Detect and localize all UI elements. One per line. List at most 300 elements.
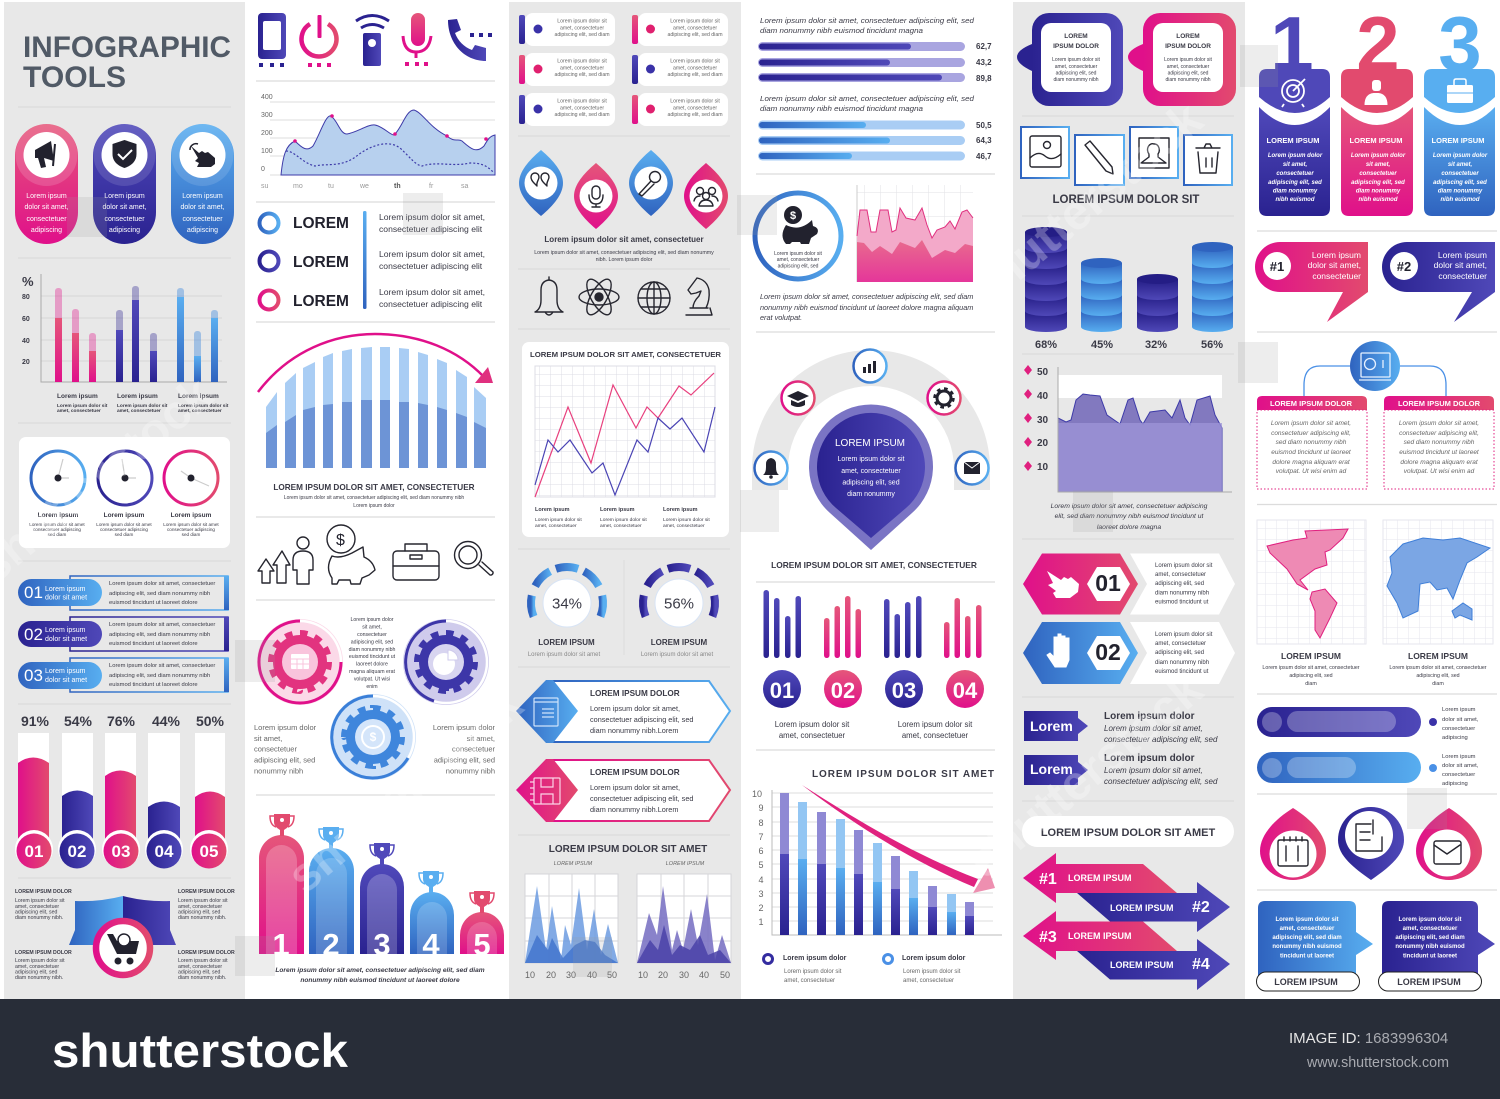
panel: four bar groups: 01 — [770, 678, 794, 703]
hex row 02: amet, consectetuer — [1155, 641, 1206, 647]
capsule: shield: dolor sit amet, — [103, 204, 147, 211]
area chart: weekly: su — [261, 183, 268, 190]
badge: microphone — [574, 163, 618, 229]
card 3: sit amet, — [1448, 162, 1473, 168]
card: blue arrow — [516, 680, 730, 743]
list: three lorem items: Lorem ipsum dolor sit amet, — [379, 287, 485, 297]
list: lorem tags: Lorem ipsum dolor — [1104, 711, 1195, 722]
bar chart: percent groups — [22, 274, 229, 414]
capsule: megaphone: adipiscing — [31, 227, 62, 234]
panel: arc with pin: Lorem ipsum dolor sit — [838, 456, 905, 463]
panel: clocks: Lorem ipsum dolor sit amet — [29, 522, 85, 527]
ribbon 02: euismod tincidunt ut laoreet dolore — [109, 641, 198, 647]
heading: center section: LOREM IPSUM DOLOR SIT AMET, CONSECTETUER — [771, 560, 977, 570]
card: blue arrow: LOREM IPSUM DOLOR — [590, 689, 680, 698]
panel: cart with four notes: diam nonummy nibh. — [15, 915, 63, 921]
text: left column: Lorem ipsum dolor — [254, 723, 317, 732]
list: lorem tags: Lorem ipsum dolor sit amet, — [1104, 724, 1203, 733]
hex row 01: amet, consectetuer — [1155, 572, 1206, 578]
icon: chart circle — [854, 350, 886, 382]
bubble 2: dolor sit amet, — [1434, 260, 1487, 270]
arrows: numbered banners: #2 — [1192, 899, 1210, 916]
panel: speech squares — [1017, 13, 1236, 106]
panel: percent columns: 44% — [152, 713, 181, 729]
chart: descending bars with arrow: 8 — [758, 818, 764, 828]
panel: gauges: LOREM IPSUM — [651, 638, 708, 647]
ribbon 03: adipiscing elit, sed diam nonummy nibh — [109, 673, 210, 679]
icon: trophy 2 — [319, 827, 343, 849]
progress bars: indigo: diam nonummy nibh euismod tincidunt magna — [760, 26, 923, 35]
hex row 01: diam nonummy nibh — [1155, 590, 1209, 596]
panel: world maps: LOREM IPSUM — [1281, 651, 1341, 661]
legend: Lorem ipsum dolor sit — [784, 969, 842, 975]
bar chart: percent groups: Lorem ipsum dolor sit — [117, 403, 168, 409]
panel: six note cards — [519, 13, 728, 126]
chart: twin peak areas: 20 — [546, 970, 556, 980]
hex row 01: Lorem ipsum dolor sit — [1155, 563, 1213, 569]
panel: world maps: Lorem ipsum dolor sit amet, consectetuer — [1262, 665, 1360, 671]
card 1: LOREM IPSUM — [1267, 136, 1319, 145]
icon: briefcase — [393, 544, 439, 580]
ribbon 01: euismod tincidunt ut laoreet dolore — [109, 600, 198, 606]
panel: cart with four notes: diam nonummy nibh. — [178, 975, 226, 981]
icon: bell — [535, 277, 563, 315]
icon: trophy 5 — [470, 891, 494, 913]
panel: cart with four notes: amet, consectetuer — [178, 904, 222, 910]
panel: line chart — [522, 342, 729, 537]
panel: four bar groups: amet, consectetuer — [902, 731, 969, 740]
panel: world maps: diam — [1432, 681, 1444, 687]
panel: six note cards: adipiscing elit, sed diam — [667, 72, 723, 78]
progress bars: indigo: 43,2 — [976, 58, 992, 67]
chart: twin peak areas: LOREM IPSUM DOLOR SIT AMET — [549, 844, 707, 855]
panel: cart with four notes: Lorem ipsum dolor sit — [15, 898, 65, 904]
chart: purple area: elit, sed diam nonummy nibh euismod tincidunt ut — [1055, 513, 1205, 520]
panel: arc with pin: adipiscing elit, sed — [842, 480, 900, 486]
gear: dollar blue: $ — [370, 730, 377, 744]
map: eurasia africa australia — [1387, 538, 1490, 620]
chart: descending bars with arrow: 10 — [752, 789, 762, 799]
panel: gauges — [528, 560, 715, 658]
badge: quotes — [519, 150, 563, 216]
panel: clocks: sed diam — [182, 532, 200, 537]
speech bubbles — [1255, 242, 1495, 322]
panel: leaf badges — [519, 150, 728, 263]
ribbon 03: euismod tincidunt ut laoreet dolore — [109, 682, 198, 688]
speech square indigo: LOREM — [1064, 33, 1088, 40]
card 2: nibh euismod — [1358, 197, 1398, 203]
icon: graduation circle — [782, 382, 814, 414]
card: pink arrow: LOREM IPSUM DOLOR — [590, 768, 680, 777]
pin: note — [1338, 807, 1404, 880]
progress bars: indigo: Lorem ipsum dolor sit amet, consectetuer adipiscing elit, sed — [760, 16, 975, 25]
chart: descending bars with arrow: 9 — [758, 803, 764, 813]
panel: line chart: Lorem ipsum — [600, 507, 635, 513]
speech square indigo: diam nonummy nibh — [1053, 77, 1099, 83]
chart: twin peak areas: LOREM IPSUM — [666, 861, 705, 867]
icon: telephone — [448, 19, 492, 61]
clock pink — [164, 451, 218, 505]
legend: Lorem ipsum dolor sit — [903, 969, 961, 975]
area chart: weekly: th — [394, 183, 401, 190]
gauge 56 percent: 56% — [664, 596, 694, 612]
panel: org split: consectetuer adipiscing elit, — [1399, 430, 1479, 437]
tile: trash — [1184, 135, 1232, 185]
panel: line chart: Lorem ipsum dolor sit — [663, 517, 710, 523]
icon: trophy 4 — [419, 871, 443, 893]
bar chart: percent groups: 20 — [22, 359, 30, 366]
area chart: weekly — [261, 94, 495, 190]
list: three lorem items: LOREM — [293, 215, 349, 232]
chart: descending bars with arrow: 3 — [758, 889, 764, 899]
icon: case — [1447, 79, 1473, 103]
panel: numbered ribbons — [18, 576, 229, 692]
chart: descending bars with arrow: 5 — [758, 860, 764, 870]
bubble 1: Lorem ipsum — [1312, 250, 1361, 260]
legend: Lorem ipsum dolor — [902, 955, 966, 962]
capsule: touch hand: adipiscing — [187, 227, 218, 234]
card 1: consectetuer — [1276, 171, 1314, 177]
capsule: touch hand: Lorem ipsum — [182, 193, 223, 200]
panel: cart with four notes: LOREM IPSUM DOLOR — [178, 889, 235, 895]
chart: descending bars with arrow: 2 — [758, 903, 764, 913]
panel: four bar groups: Lorem ipsum dolor sit — [898, 720, 973, 729]
panel: clocks: consectetuer adipiscing — [33, 527, 81, 532]
panel: line chart: Lorem ipsum dolor sit — [600, 517, 647, 523]
panel: three gears — [254, 617, 496, 780]
panel: percent columns: 91% — [21, 713, 50, 729]
panel: leaf badges: nibh. Lorem ipsum dolor — [596, 257, 653, 263]
logo: shutterstock — [52, 1024, 349, 1077]
panel: org split: euismod tincidunt ut laoreet — [1399, 449, 1480, 456]
panel: cart with four notes: adipiscing elit, sed — [178, 910, 221, 916]
callout: blue box: amet, consectetuer — [1280, 926, 1335, 932]
hex row 01 — [1023, 554, 1235, 614]
panel: numbered cards — [1259, 0, 1495, 216]
clock blue — [31, 451, 85, 505]
area chart: weekly: 0 — [261, 166, 265, 173]
chart: descending bars with arrow: 6 — [758, 846, 764, 856]
chart: twin peak areas: 50 — [607, 970, 617, 980]
panel: gauges: LOREM IPSUM — [538, 638, 595, 647]
text: center column: sit amet, — [362, 624, 382, 630]
progress bars: blue: 50,5 — [976, 121, 992, 130]
chart: twin peak areas: 50 — [720, 970, 730, 980]
hex row 01: 01 — [1095, 570, 1121, 596]
tile: portrait — [1130, 127, 1178, 178]
area chart: weekly: we — [359, 183, 369, 190]
text: center column: magna aliquam erat — [349, 669, 395, 675]
panel: cart with four notes: adipiscing elit, sed — [178, 970, 221, 976]
panel: line chart: amet, consectetuer — [663, 523, 705, 529]
text: center column: volutpat. Ut wisi — [354, 676, 390, 682]
hex row 02: 02 — [1095, 639, 1121, 665]
pin: mail — [1416, 808, 1482, 880]
capsule: shield: adipiscing — [109, 227, 140, 234]
bar chart: percent groups: Lorem ipsum dolor sit — [178, 403, 229, 409]
bubble 1: consectetuer — [1312, 271, 1361, 281]
legend: amet, consectetuer — [784, 978, 835, 984]
speech square pink: IPSUM DOLOR — [1165, 43, 1211, 50]
list: lorem tags: Lorem ipsum dolor — [1104, 753, 1195, 764]
chart: purple area: 50 — [1037, 367, 1049, 378]
card 3: consectetuer — [1441, 171, 1479, 177]
gear: chart indigo — [403, 619, 489, 705]
text: center column: diam nonummy nibh — [349, 647, 395, 653]
card: pink arrow: diam nonummy nibh.Lorem — [590, 805, 678, 814]
hex row 02: adipiscing elit, sed — [1155, 650, 1204, 656]
speech square pink: LOREM — [1176, 33, 1200, 40]
card: pink arrow: Lorem ipsum dolor sit amet, — [590, 783, 680, 792]
panel: numbered cards: 1 — [1270, 0, 1314, 88]
chart: twin peak areas: 30 — [566, 970, 576, 980]
speech square indigo: IPSUM DOLOR — [1053, 43, 1099, 50]
gear: dollar blue — [330, 694, 416, 780]
icon: chess knight — [686, 278, 712, 315]
panel: percent columns: 50% — [196, 713, 225, 729]
icon: notebook — [530, 778, 560, 804]
icon: globe — [638, 282, 670, 314]
panel: leaf badges: Lorem ipsum dolor sit amet, consectetuer adipiscing elit, sed diam nonummy — [534, 250, 714, 256]
icon: trophy 1 — [270, 814, 294, 836]
watermark overlay: shutterstock — [958, 662, 1213, 888]
card 3: adipiscing elit, sed — [1433, 180, 1487, 186]
progress bars: blue: 46,7 — [976, 152, 992, 161]
panel: six note cards: Lorem ipsum dolor sit — [557, 98, 607, 104]
icon: cart — [107, 934, 139, 964]
text: left column — [254, 723, 317, 776]
text: left column: nonummy nibh — [254, 766, 303, 776]
panel: world maps: adipiscing elit, sed — [1416, 673, 1460, 679]
panel: arc with pin: LOREM IPSUM — [835, 438, 905, 449]
panel: clocks: Lorem ipsum — [104, 512, 145, 519]
callout: blue box: LOREM IPSUM — [1274, 977, 1338, 987]
panel: four bar groups: 04 — [953, 678, 978, 703]
card 2: sit amet, — [1366, 162, 1391, 168]
capsule: shield: Lorem ipsum — [104, 193, 145, 200]
bar chart: percent groups: 60 — [22, 316, 30, 323]
list: lorem tags: consectetuer adipiscing elit, sed — [1104, 777, 1218, 786]
chart: purple area: 30 — [1037, 415, 1049, 426]
bar chart: percent groups: Lorem ipsum — [117, 393, 158, 400]
chart: trophy bars: Lorem ipsum dolor sit amet, consectetuer adipiscing elit, sed diam — [275, 967, 485, 974]
panel: org split: sed diam nonummy nibh — [1276, 439, 1347, 446]
panel: org split: Lorem ipsum dolor sit amet, — [1271, 420, 1351, 427]
callout: indigo box: LOREM IPSUM — [1397, 977, 1461, 987]
panel: percent columns — [15, 713, 228, 868]
panel: org split: sed diam nonummy nibh — [1404, 439, 1475, 446]
icon row: outline concepts — [535, 276, 712, 318]
tile: image — [1021, 127, 1069, 178]
image id: IMAGE ID: 1683996304 — [1289, 1030, 1448, 1047]
panel: six note cards: amet, consectetuer — [673, 66, 717, 72]
badge: key — [629, 150, 673, 216]
panel: leaf badges: Lorem ipsum dolor sit amet, consectetuer — [544, 235, 704, 244]
panel: six note cards: adipiscing elit, sed diam — [667, 112, 723, 118]
callout: indigo box: amet, consectetuer — [1403, 926, 1458, 932]
panel: percent columns: 04 — [155, 842, 174, 861]
card 2: consectetuer — [1359, 171, 1397, 177]
ribbon 01: Lorem ipsum dolor sit amet, consectetuer — [109, 581, 215, 587]
panel: six note cards: Lorem ipsum dolor sit — [557, 58, 607, 64]
icon: bell circle — [754, 452, 788, 484]
callout: blue box — [1256, 901, 1373, 991]
text: center column: Lorem ipsum dolor — [351, 617, 394, 623]
card 1: Lorem ipsum dolor — [1268, 153, 1323, 159]
panel: clocks: consectetuer adipiscing — [167, 527, 215, 532]
area chart: weekly: 400 — [261, 94, 273, 101]
chart: purple area: Lorem ipsum dolor sit amet, consectetuer adipiscing — [1051, 503, 1208, 510]
callout: indigo box: tincidunt ut laoreet — [1403, 954, 1457, 960]
card: pink arrow: consectetuer adipiscing elit, sed — [590, 794, 693, 803]
arrows: numbered banners: #4 — [1192, 956, 1210, 973]
icon: power — [301, 15, 336, 67]
icon: phone — [258, 13, 286, 67]
panel: arc with pin: amet, consectetuer — [841, 468, 901, 475]
list: three lorem items: consectetuer adipiscing elit — [379, 299, 483, 309]
icon: magnifier — [454, 542, 493, 575]
card 2 — [1341, 69, 1413, 216]
panel: cart with four notes: amet, consectetuer — [15, 964, 59, 970]
card 2: LOREM IPSUM — [1350, 136, 1402, 145]
text: right column: consectetuer — [452, 744, 495, 754]
bar chart: percent groups: % — [22, 274, 34, 289]
capsule: shield: consectetuer — [104, 216, 145, 223]
capsule: touch hand: consectetuer — [182, 216, 223, 223]
chart: trophy bars: 1 — [272, 927, 290, 962]
panel: percent columns: 54% — [64, 713, 93, 729]
panel: arc with pin — [752, 350, 990, 550]
panel: cart with four notes: adipiscing elit, sed — [15, 970, 58, 976]
capsule: megaphone — [15, 124, 78, 244]
panel: world maps: Lorem ipsum dolor sit amet, consectetuer — [1389, 665, 1487, 671]
ribbon 02: Lorem ipsum — [45, 627, 86, 634]
panel: cart with four notes: LOREM IPSUM DOLOR — [178, 950, 235, 956]
list: three lorem items: LOREM — [293, 254, 349, 271]
chart: twin peak areas: 30 — [679, 970, 689, 980]
chart: trophy bars: 2 — [322, 927, 340, 962]
legend: Lorem ipsum dolor — [783, 955, 847, 962]
card 3 — [1424, 69, 1495, 216]
panel: clocks: sed diam — [115, 532, 133, 537]
panel: percent columns: 76% — [107, 713, 136, 729]
speech square pink: amet, consectetuer — [1167, 64, 1210, 70]
panel: org split: volutpat. Ut wisi enim ad — [1276, 468, 1347, 475]
callout: indigo box — [1378, 901, 1495, 991]
panel: savings circle and pink area: Lorem ipsum dolor sit amet, consectetuer adipiscing elit, sed diam — [760, 292, 973, 301]
gauge 56 percent — [643, 567, 715, 627]
panel: six note cards: adipiscing elit, sed diam — [554, 112, 610, 118]
panel: clocks: sed diam — [48, 532, 66, 537]
chart: arch bars with arrow: Lorem ipsum dolor — [353, 503, 395, 509]
chart: trophy bars: nonummy nibh euismod tincidunt ut laoreet dolore — [300, 977, 460, 984]
list: lorem tags: Lorem — [1030, 718, 1073, 734]
callout: blue box: adipiscing elit, sed diam — [1272, 935, 1342, 941]
bubble 2 — [1382, 242, 1495, 322]
callout: indigo box: adipiscing elit, sed diam — [1395, 935, 1465, 941]
chart: descending bars with arrow: 4 — [758, 875, 764, 885]
panel: six note cards: Lorem ipsum dolor sit — [670, 58, 720, 64]
panel: org split — [1257, 341, 1494, 489]
bubble 2: #2 — [1397, 259, 1411, 274]
ribbon 02 — [18, 617, 229, 651]
speech square indigo: adipiscing elit, sed — [1056, 70, 1097, 76]
icon row: devices — [258, 13, 492, 67]
icon: target — [1282, 79, 1305, 107]
hex row 01: adipiscing elit, sed — [1155, 581, 1204, 587]
list: lorem tags: Lorem ipsum dolor sit amet, — [1104, 766, 1203, 775]
panel: cart with four notes: LOREM IPSUM DOLOR — [15, 889, 72, 895]
gear: calendar pink — [257, 619, 343, 705]
progress bars: indigo: 89,8 — [976, 74, 992, 83]
ribbon 01 — [18, 576, 229, 610]
panel: savings circle and pink area — [755, 185, 973, 322]
icon: mail circle — [956, 452, 988, 484]
panel: line chart: Lorem ipsum — [535, 507, 570, 513]
arrows: numbered banners: #1 — [1039, 871, 1057, 888]
tile: pencil — [1075, 135, 1124, 185]
ribbon 03: dolor sit amet — [45, 677, 87, 684]
icon: growth person — [258, 537, 313, 584]
text: center column — [349, 617, 396, 690]
callout: blue box: tincidunt ut laoreet — [1280, 954, 1334, 960]
footer bar — [0, 999, 1500, 1099]
icon: remote — [356, 16, 389, 66]
ribbon 02: dolor sit amet — [45, 636, 87, 643]
text: left column: consectetuer — [254, 744, 297, 754]
area chart: weekly: tu — [328, 183, 334, 190]
badge: people — [684, 163, 728, 229]
bubble 1: #1 — [1270, 259, 1284, 274]
panel: icon tiles — [1021, 127, 1232, 206]
panel: six note cards: Lorem ipsum dolor sit — [670, 18, 720, 24]
heading pill: LOREM IPSUM DOLOR SIT AMET — [1041, 827, 1215, 839]
chart: stacked cylinders: 45% — [1091, 339, 1113, 351]
panel: line chart: amet, consectetuer — [535, 523, 577, 529]
hex row 02: euismod tincidunt ut — [1155, 669, 1209, 675]
icon: pointing hand — [1047, 571, 1079, 598]
area chart: weekly: sa — [461, 183, 468, 190]
bar chart: percent groups: Lorem ipsum — [178, 393, 219, 400]
panel: progress pills: dolor sit amet, — [1442, 763, 1479, 769]
column backgrounds — [4, 2, 1245, 999]
chart: arch bars with arrow — [258, 334, 493, 509]
panel: world maps: adipiscing elit, sed — [1289, 673, 1333, 679]
area chart: weekly: fr — [429, 183, 434, 190]
text: left column: sit amet, — [254, 734, 282, 743]
chart: stacked cylinders: 32% — [1145, 339, 1167, 351]
panel: six note cards: adipiscing elit, sed diam — [554, 72, 610, 78]
heading pill — [1022, 816, 1234, 847]
chart: twin peak areas: 20 — [658, 970, 668, 980]
chart: twin peak areas: LOREM IPSUM — [554, 861, 593, 867]
chart: purple area: laoreet dolore magna — [1097, 524, 1161, 531]
panel: six note cards: adipiscing elit, sed diam — [554, 32, 610, 38]
chart: twin peak areas: 10 — [525, 970, 535, 980]
icon: open hand — [1047, 634, 1069, 667]
speech square indigo — [1017, 13, 1123, 106]
callout: indigo box: Lorem ipsum dolor sit — [1398, 917, 1462, 923]
chart: purple area: 10 — [1037, 462, 1049, 473]
website: www.shutterstock.com — [1306, 1055, 1449, 1071]
ribbon 01: 01 — [24, 583, 43, 602]
panel: line chart: LOREM IPSUM DOLOR SIT AMET, CONSECTETUER — [530, 350, 722, 359]
card: pink arrow — [516, 759, 730, 822]
panel: six note cards: amet, consectetuer — [673, 106, 717, 112]
text: center column: laoreet dolore — [356, 662, 388, 668]
arrows: numbered banners: LOREM IPSUM — [1110, 960, 1174, 970]
chart: trophy bars: 5 — [473, 927, 491, 962]
